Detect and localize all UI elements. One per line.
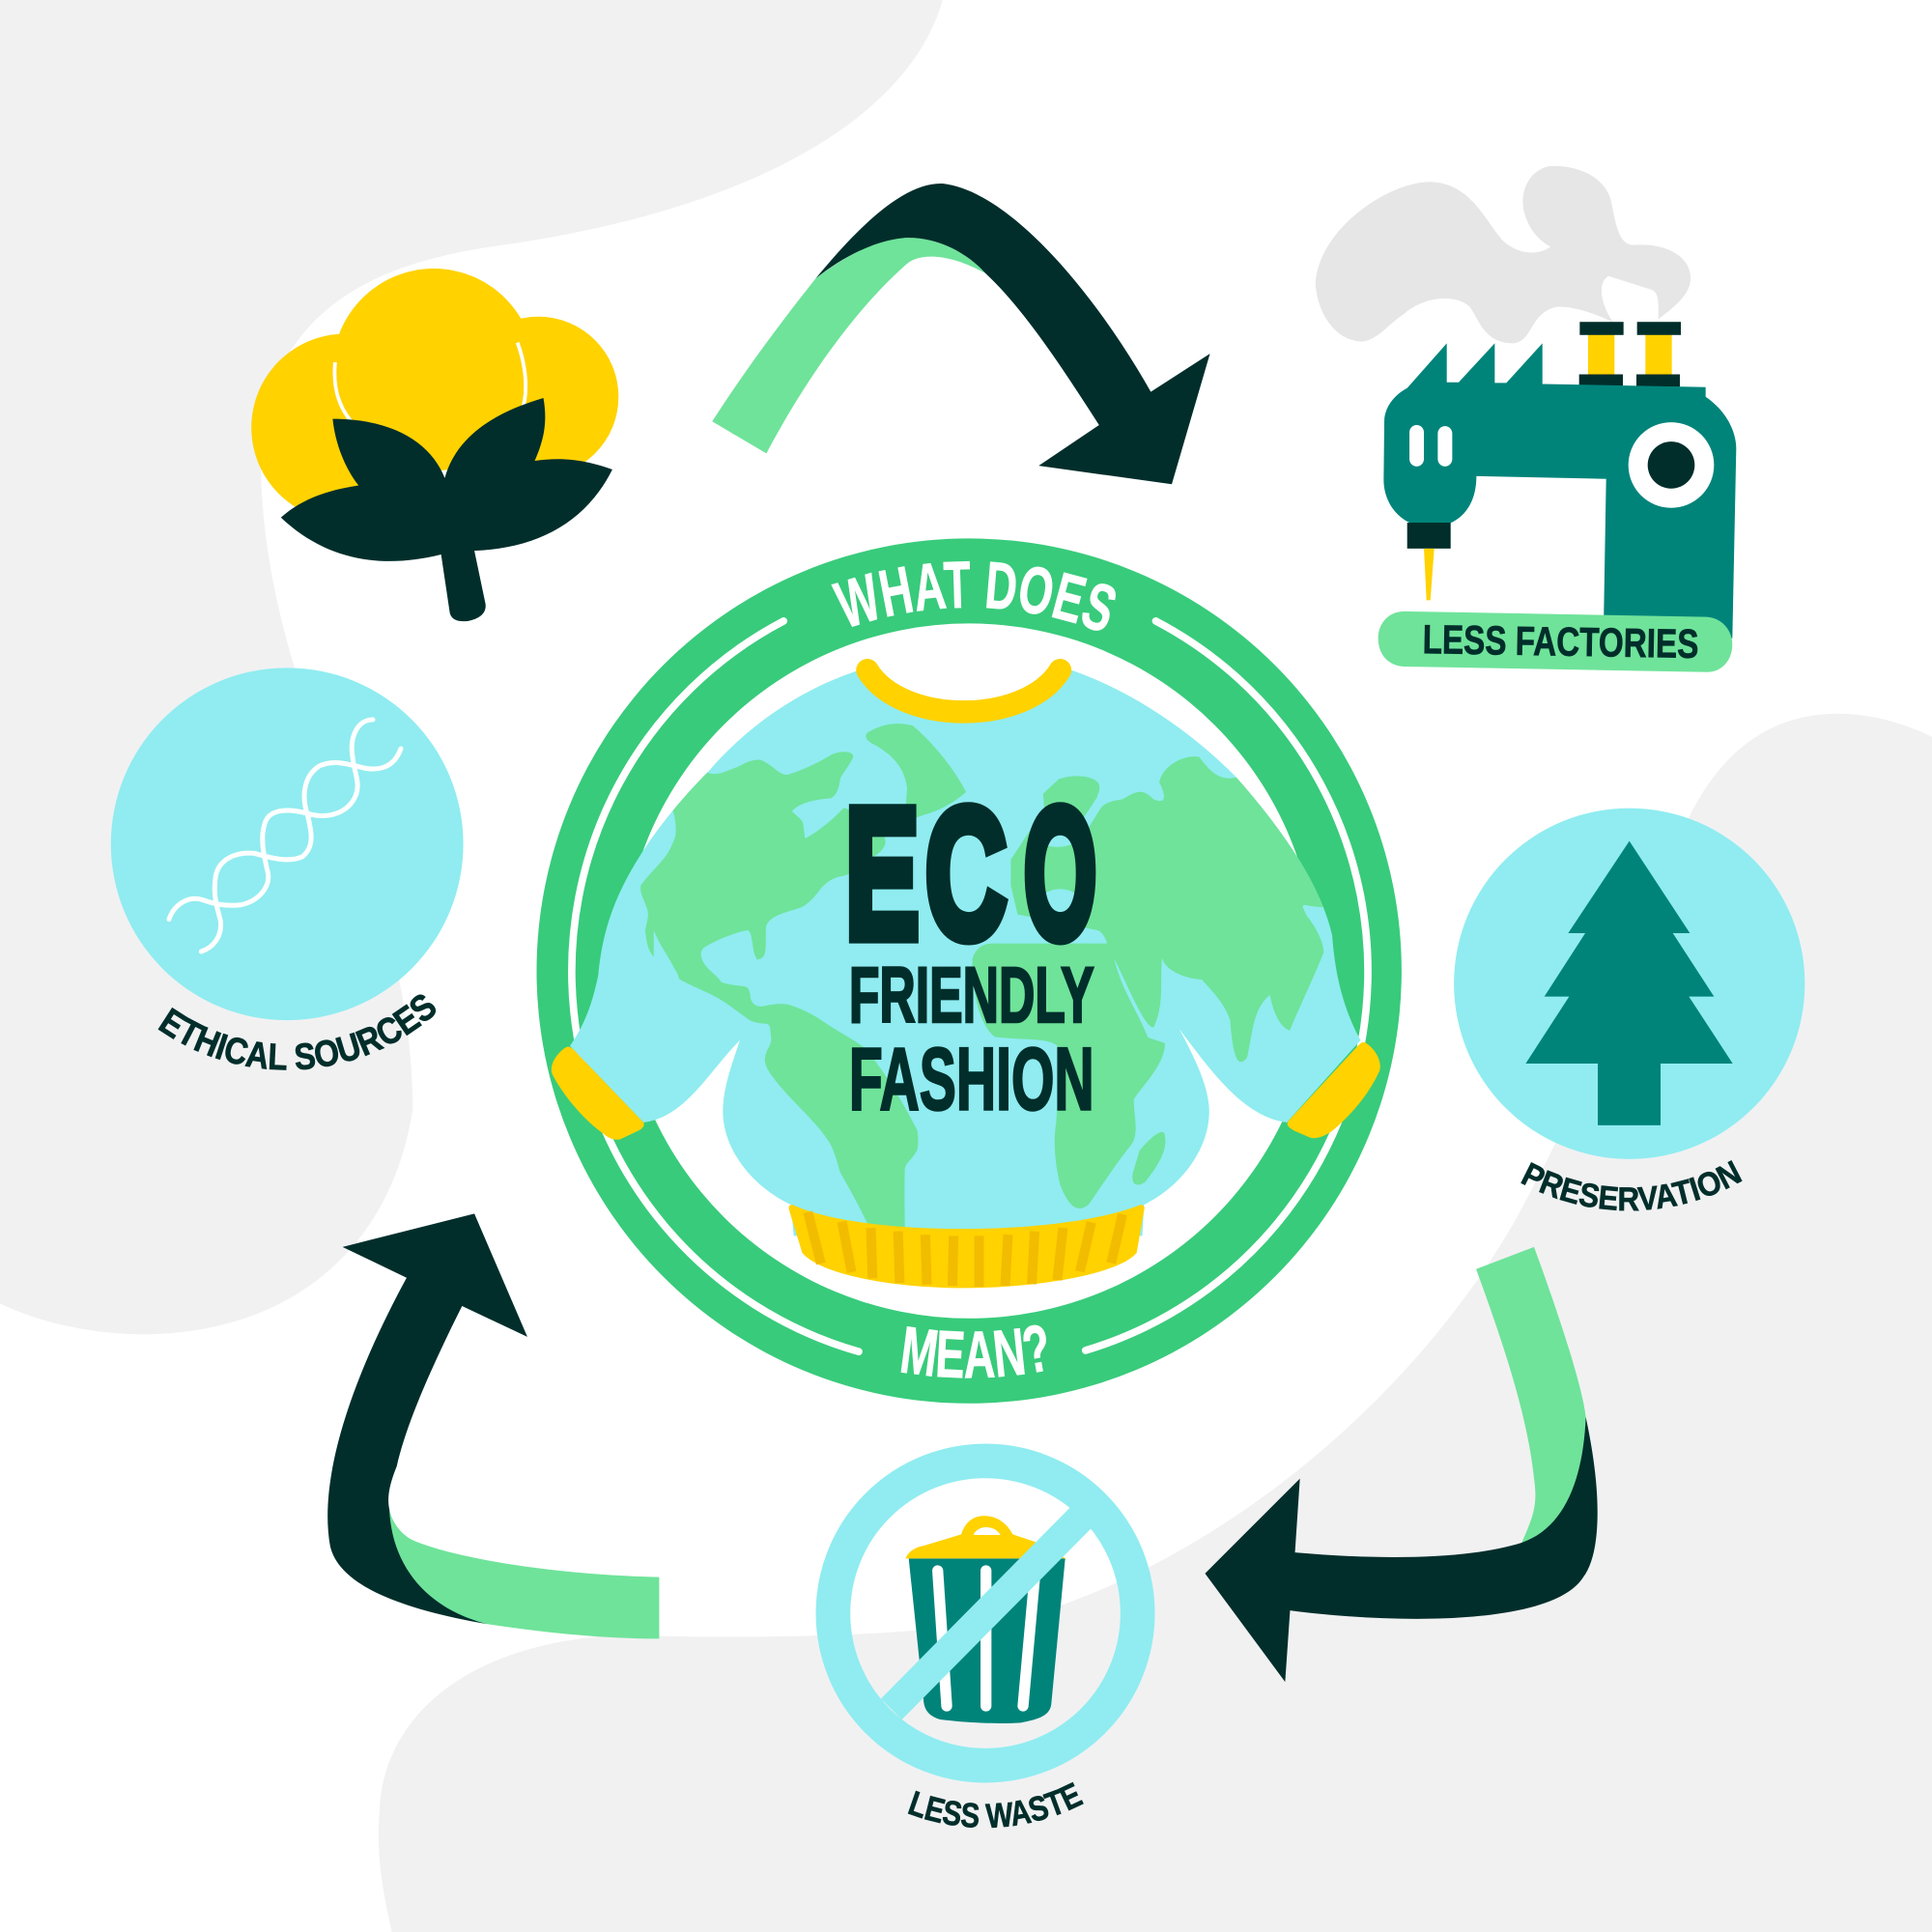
icon: crossed out trash can [833,1461,1138,1766]
world map land [635,724,1338,1236]
arrow: right recycling arrow [1205,1247,1598,1682]
icon: pine tree [1525,841,1733,1125]
title: fashion: FASHION [849,1031,1094,1129]
sweater collar [867,670,1060,712]
illustration: globe sweater [552,670,1380,1288]
arrow: left recycling arrow [327,1213,659,1638]
badge inner circle [621,623,1317,1319]
background: bottom-right grey blob [379,714,1932,1932]
label pill [1378,611,1732,672]
label: preservation: PRESERVATION [1520,1160,1743,1211]
title: eco: O [1024,770,1096,977]
icon: DNA circle [111,668,464,1020]
title: eco: C [925,770,1007,977]
panel: less waste [815,1443,1155,1828]
icon: DNA helix [169,720,401,952]
panel: central badge [537,538,1402,1404]
icon: cotton plant [251,269,618,621]
panel: ethical sources [110,668,464,1070]
label: less waste: LESS WASTE [908,1781,1084,1828]
title: eco: E [845,770,920,977]
panel: less factories [1316,166,1736,672]
icon: sewing machine factory [1383,322,1736,639]
label: ethical sources: ETHICAL SOURCES [158,995,437,1070]
badge ring [536,538,1402,1404]
title: friendly: FRIENDLY [849,952,1094,1039]
label: less factories: LESS FACTORIES [1422,616,1699,667]
icon: tree circle [1454,809,1804,1159]
panel: preservation [1454,808,1804,1211]
title: eco [845,770,1096,977]
sweater hem [789,1205,1145,1288]
heading: what does: WHAT DOES [831,560,1116,631]
arrow: top recycling arrow [712,184,1210,484]
right cuff [1288,1042,1380,1138]
heading: mean: MEAN? [900,1325,1046,1378]
left cuff [552,1047,644,1140]
ring line left [572,621,859,1351]
icon: smoke [1316,166,1690,343]
ring line right [1086,621,1368,1350]
sweater body [570,670,1360,1236]
background: top-left grey blob [0,0,943,1334]
